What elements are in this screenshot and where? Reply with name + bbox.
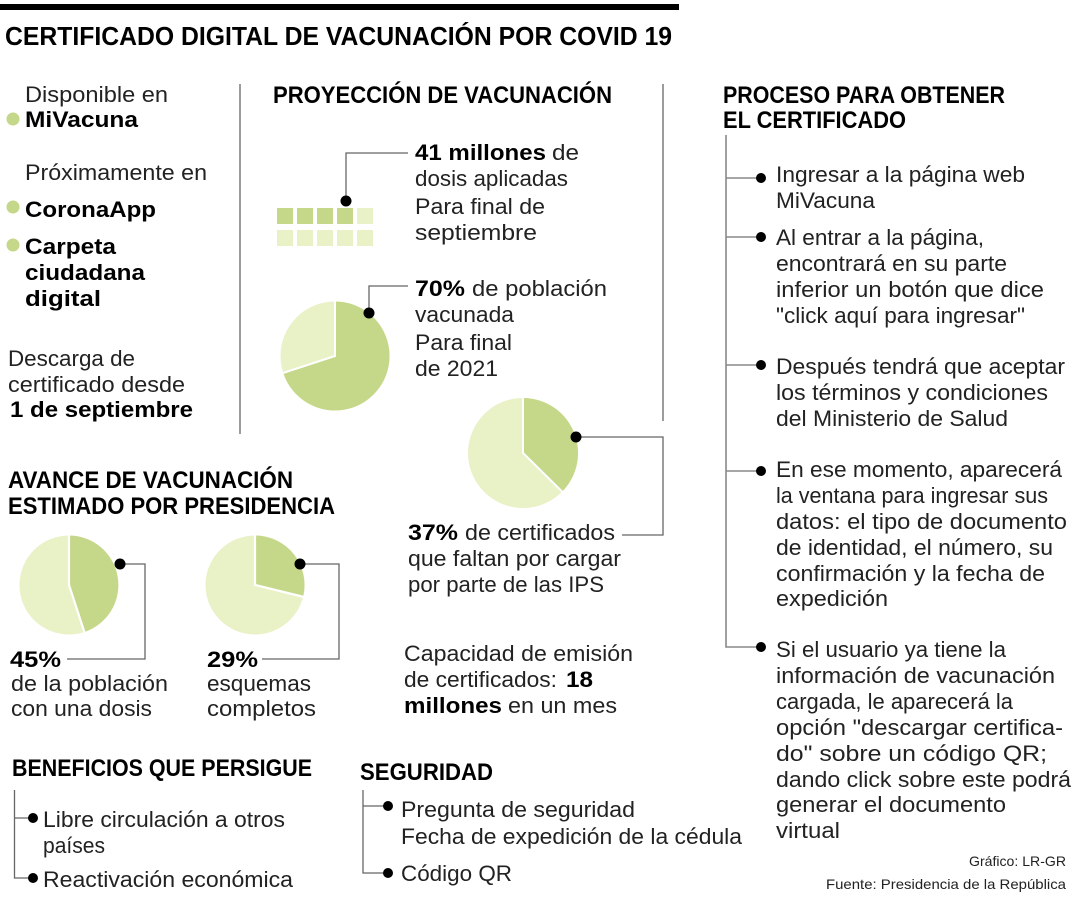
text: 45% one dose: con una dosis [11, 696, 152, 721]
text: 70% population: 70% [415, 276, 465, 301]
top bar [0, 4, 679, 10]
source credits [826, 853, 1066, 892]
panel: security: Pregunta de seguridad [401, 797, 635, 822]
step 5: generar el documento [776, 792, 1006, 817]
text: download date: Descarga de [8, 346, 135, 371]
text: 37% certificates: por parte de las IPS [408, 572, 604, 597]
text: 45% one dose: de la población [11, 671, 168, 696]
text: issuing capacity: 18 [566, 667, 593, 692]
text: 37% certificates: que faltan por cargar [408, 546, 622, 571]
step 4: confirmación y la fecha de [776, 561, 1045, 586]
step 5: Si el usuario ya tiene la [776, 637, 1006, 662]
text: 70% population: Para final [415, 330, 512, 355]
step 5: virtual [776, 818, 840, 843]
step 3: los términos y condiciones [776, 380, 1048, 405]
text: 37% certificates: de certificados [465, 520, 615, 545]
panel: security: Fecha de expedición de la cédula [401, 824, 742, 849]
step 2: inferior un botón que dice [776, 277, 1044, 302]
panel: availability: Carpeta [25, 234, 117, 259]
heading: vaccination projection: PROYECCIÓN DE VACUNACIÓN [273, 81, 612, 109]
text: 70% population: de población [472, 276, 607, 301]
text: download date: certificado desde [8, 372, 185, 397]
panel: availability: Disponible en [25, 82, 168, 107]
panel: security [360, 759, 742, 886]
chart: 37% pie [468, 398, 663, 535]
text: 41 million doses: 41 millones [415, 140, 546, 165]
heading: vaccination progress [8, 466, 335, 520]
text: 70% population [415, 276, 607, 381]
step 5: opción "descargar certifica- [776, 715, 1063, 740]
panel: benefits: BENEFICIOS QUE PERSIGUE [12, 755, 312, 782]
text: 41 million doses: septiembre [415, 220, 537, 245]
source credits: Gráfico: LR-GR [969, 853, 1066, 869]
panel: security: SEGURIDAD [360, 759, 493, 786]
step 5: información de vacunación [776, 663, 1055, 688]
panel: benefits [12, 755, 312, 892]
step 2 [776, 225, 1044, 328]
text: 70% population: de 2021 [415, 356, 498, 381]
step 2: "click aquí para ingresar" [776, 303, 1025, 328]
step 3 [776, 354, 1066, 431]
timeline [726, 135, 766, 652]
text: 41 million doses: de [552, 140, 579, 165]
heading: vaccination progress: ESTIMADO POR PRESIDENCIA [8, 493, 335, 520]
heading: process: EL CERTIFICADO [723, 107, 906, 134]
step 3: Después tendrá que aceptar [776, 354, 1066, 379]
panel: availability: Próximamente en [25, 160, 207, 185]
panel: benefits: países [43, 833, 105, 858]
step 1: MiVacuna [776, 188, 875, 213]
text: issuing capacity: millones [404, 693, 502, 718]
step 4: de identidad, el número, su [776, 535, 1053, 560]
text: 70% population: vacunada [415, 302, 514, 327]
chart: 29% pie [206, 535, 339, 659]
step 5: dando click sobre este podrá [776, 767, 1071, 792]
chart: 70% pie [280, 286, 408, 410]
step 5 [776, 637, 1071, 843]
step 4: expedición [776, 586, 888, 611]
panel: security: Código QR [401, 861, 512, 886]
panel: availability: MiVacuna [25, 107, 139, 132]
step 4: En ese momento, aparecerá [776, 457, 1062, 482]
panel: benefits: Reactivación económica [43, 867, 293, 892]
text: 29% complete schemes [207, 647, 316, 721]
heading: vaccination progress: AVANCE DE VACUNACIÓN [8, 466, 293, 494]
text: 37% certificates [408, 520, 622, 597]
step 2: encontrará en su parte [776, 251, 1007, 276]
text: 41 million doses: dosis aplicadas [415, 166, 568, 191]
step 4: datos: el tipo de documento [776, 509, 1067, 534]
panel: process to obtain certificate [723, 82, 1071, 843]
step 1: Ingresar a la página web [776, 162, 1025, 187]
text: 45% one dose [10, 647, 168, 721]
text: issuing capacity: de certificados: [404, 667, 557, 692]
text: 41 million doses: Para final de [415, 194, 545, 219]
step 4: la ventana para ingresar sus [776, 483, 1048, 508]
text: issuing capacity [404, 641, 633, 718]
text: issuing capacity: Capacidad de emisión [404, 641, 633, 666]
title: CERTIFICADO DIGITAL DE VACUNACIÓN POR COVID 19 [5, 21, 672, 51]
step 5: cargada, le aparecerá la [776, 689, 1013, 714]
text: issuing capacity: en un mes [508, 693, 617, 718]
panel: availability [6, 82, 207, 311]
step 4 [776, 457, 1067, 611]
panel: benefits: Libre circulación a otros [43, 807, 285, 832]
text: 29% complete schemes: esquemas [207, 671, 311, 696]
text: 37% certificates: 37% [408, 520, 458, 545]
text: 29% complete schemes: completos [207, 696, 316, 721]
source credits: Fuente: Presidencia de la República [826, 876, 1066, 892]
step 2: Al entrar a la página, [776, 225, 984, 250]
chart: 45% pie [20, 535, 145, 659]
panel: availability: CoronaApp [25, 197, 156, 222]
step 5: do" sobre un código QR; [776, 741, 1047, 766]
panel: availability: digital [25, 286, 101, 311]
text: 45% one dose: 45% [10, 647, 61, 672]
text: download date: 1 de septiembre [10, 397, 193, 422]
heading: process: PROCESO PARA OBTENER [723, 82, 1005, 109]
heading: process [723, 82, 1005, 134]
step 1 [776, 162, 1025, 213]
step 3: del Ministerio de Salud [776, 406, 1008, 431]
panel: availability: ciudadana [25, 260, 146, 285]
text: download date [8, 346, 193, 422]
chart: doses squares [277, 153, 408, 246]
text: 29% complete schemes: 29% [207, 647, 258, 672]
text: 41 million doses [415, 140, 579, 245]
